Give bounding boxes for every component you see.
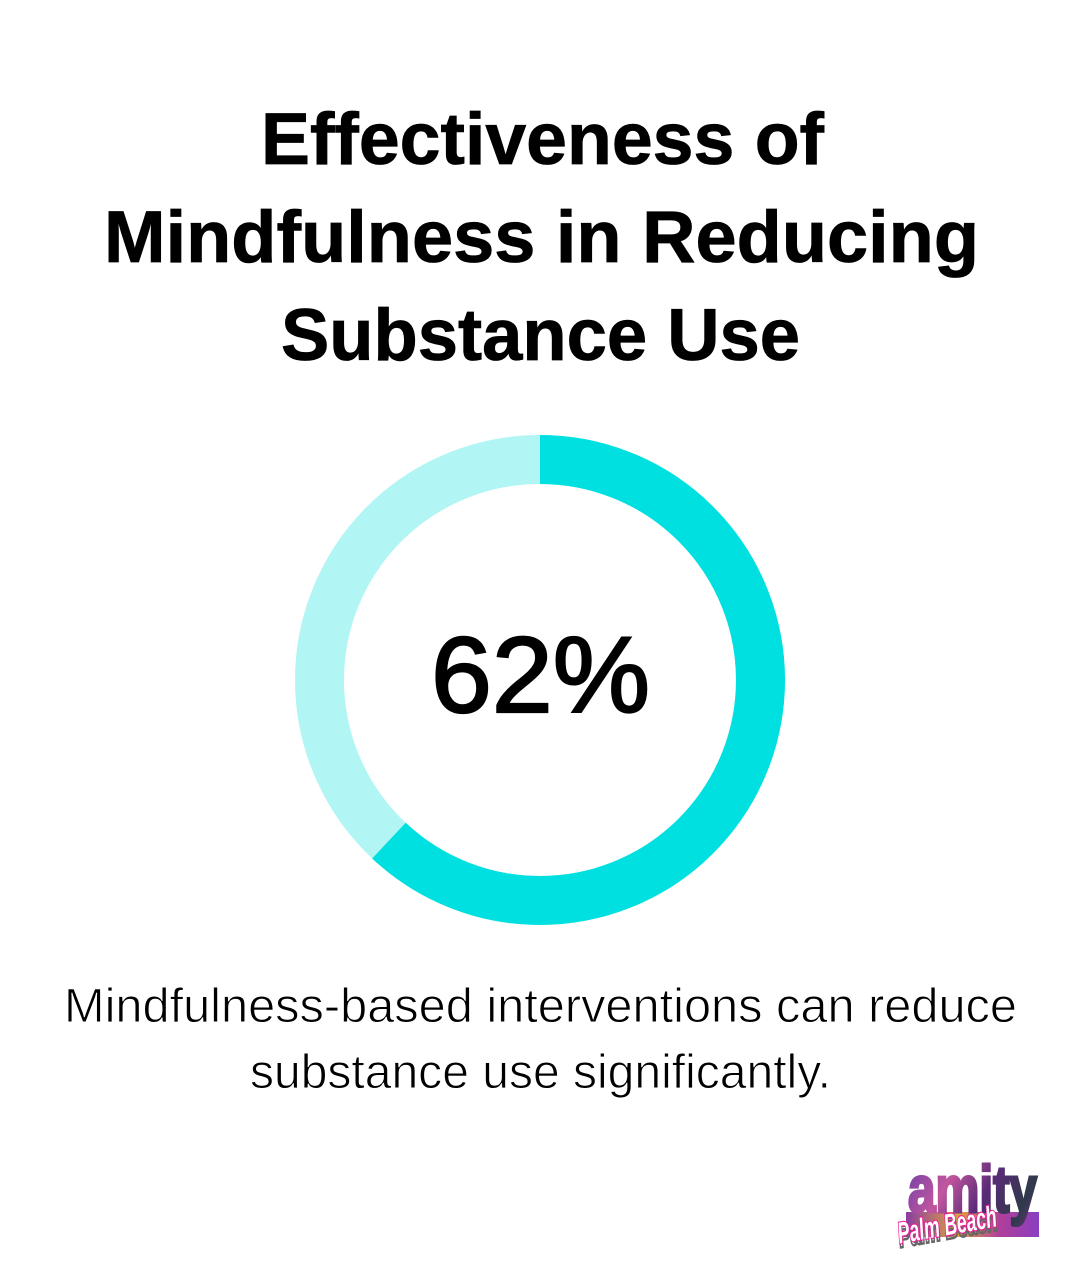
description text: substance use significantly. bbox=[250, 1046, 831, 1099]
logo background scene bbox=[906, 1212, 1039, 1237]
title: Substance Use bbox=[281, 295, 800, 376]
title: Mindfulness in Reducing bbox=[104, 197, 979, 278]
description text: Mindfulness-based interventions can reduce bbox=[64, 980, 1017, 1033]
logo: amity Palm Beach bbox=[895, 1152, 1039, 1254]
logo script: Palm Beach bbox=[895, 1201, 999, 1250]
title: Effectiveness of bbox=[261, 99, 825, 180]
logo script shadow: Palm Beach bbox=[896, 1204, 1000, 1254]
donut value arc bbox=[320, 460, 760, 900]
title bbox=[104, 99, 979, 376]
description text bbox=[64, 980, 1017, 1099]
donut track bbox=[320, 460, 760, 900]
donut value label: 62% bbox=[431, 614, 650, 735]
donut chart: 62% bbox=[320, 460, 760, 900]
logo wordmark: amity bbox=[908, 1152, 1037, 1226]
